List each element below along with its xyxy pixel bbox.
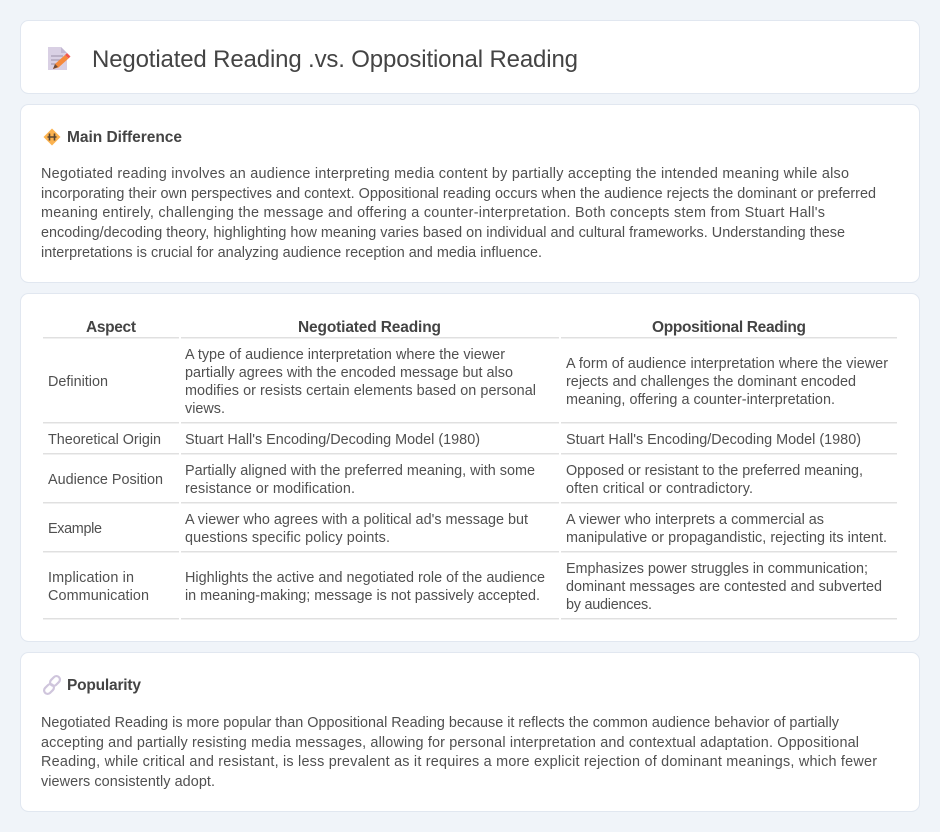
text block: popularity: accepting and partially resisting media messages, allowing for personal interpretation and contextual adaptation. Oppositional	[41, 735, 859, 751]
text block: popularity	[41, 715, 877, 790]
panel: title header	[20, 20, 920, 94]
table row: example: A viewer who agrees with a political ad's message but	[185, 512, 528, 528]
table header row: Oppositional Reading	[652, 319, 806, 336]
table header row: Negotiated Reading	[298, 319, 441, 336]
table row: implication in communication: in meaning-making; message is not passively accepted.	[185, 588, 540, 604]
text block: popularity: viewers consistently adopt.	[41, 774, 215, 790]
text block: main difference	[41, 166, 876, 261]
table row: audience position: Opposed or resistant to the preferred meaning,	[566, 463, 863, 479]
text block: main difference: meaning entirely, challenging the message and offering a counter-interpretation. Both concepts stem from Stuart Hall's	[41, 205, 825, 221]
table row: implication in communication: dominant messages are contested and subverted	[566, 579, 882, 595]
table row: implication in communication: Emphasizes power struggles in communication;	[566, 561, 868, 577]
table row: implication in communication: Communication	[48, 588, 149, 604]
table row: example	[48, 512, 887, 546]
table row: theoretical origin: Stuart Hall's Encoding/Decoding Model (1980)	[185, 432, 480, 448]
panel: popularity	[20, 652, 920, 812]
table row: theoretical origin	[48, 432, 861, 448]
table row: example: questions specific policy points.	[185, 530, 390, 546]
table row: definition: Definition	[48, 374, 108, 390]
text block: popularity: Reading, while critical and resistant, is less prevalent as it requires a more explicit rejection of dominant meanings, which fewer	[41, 754, 877, 770]
table row: implication in communication: by audiences.	[566, 597, 652, 613]
text block: main difference: incorporating their own perspectives and context. Oppositional reading occurs when the audience rejects the dominant or preferred	[41, 186, 876, 202]
table row: definition: A type of audience interpretation where the viewer	[185, 347, 505, 363]
table row: definition: partially agrees with the encoded message but also	[185, 365, 513, 381]
table row: definition: meaning, offering a counter-interpretation.	[566, 392, 835, 408]
text block: main difference: interpretations is crucial for analyzing audience reception and media influence.	[41, 245, 542, 261]
table row: audience position: often critical or contradictory.	[566, 481, 753, 497]
panel: main difference	[20, 104, 920, 282]
table row: definition: rejects and challenges the dominant encoded	[566, 374, 856, 390]
table row: implication in communication: Implication in	[48, 570, 134, 586]
table row: definition: modifies or resists certain elements based on personal	[185, 383, 536, 399]
table row: implication in communication	[48, 561, 882, 613]
table row: example: A viewer who interprets a commercial as	[566, 512, 824, 528]
panel: comparison table	[20, 294, 920, 642]
text block: main difference: Negotiated reading involves an audience interpreting media content by partially accepting the intended meaning while also	[41, 166, 849, 182]
text block: main difference: encoding/decoding theory, highlighting how meaning varies based on individual and cultural frameworks. Understanding these	[41, 225, 845, 241]
title: Negotiated Reading .vs. Oppositional Reading	[92, 46, 578, 73]
icon: warning diamond	[44, 128, 60, 146]
table row: definition	[48, 347, 888, 417]
table row: audience position: resistance or modification.	[185, 481, 355, 497]
table row: theoretical origin: Theoretical Origin	[48, 432, 161, 448]
icon: document with pencil	[48, 47, 70, 70]
table row: example: manipulative or propagandistic, rejecting its intent.	[566, 530, 887, 546]
table row: theoretical origin: Stuart Hall's Encoding/Decoding Model (1980)	[566, 432, 861, 448]
table row: audience position: Partially aligned with the preferred meaning, with some	[185, 463, 535, 479]
table row: implication in communication: Highlights the active and negotiated role of the audience	[185, 570, 545, 586]
table header row	[86, 319, 806, 336]
table row: definition: A form of audience interpretation where the viewer	[566, 356, 888, 372]
table row: definition: views.	[185, 401, 225, 417]
text block: popularity: Negotiated Reading is more popular than Oppositional Reading because it reflects the common audience behavior of partially	[41, 715, 840, 731]
table row: audience position	[48, 463, 863, 497]
table row: example: Example	[48, 521, 102, 537]
heading: main difference: Main Difference	[67, 129, 182, 146]
icon: chain link	[43, 675, 61, 695]
heading: popularity: Popularity	[67, 677, 141, 694]
table row: audience position: Audience Position	[48, 472, 163, 488]
table header row: Aspect	[86, 319, 136, 336]
